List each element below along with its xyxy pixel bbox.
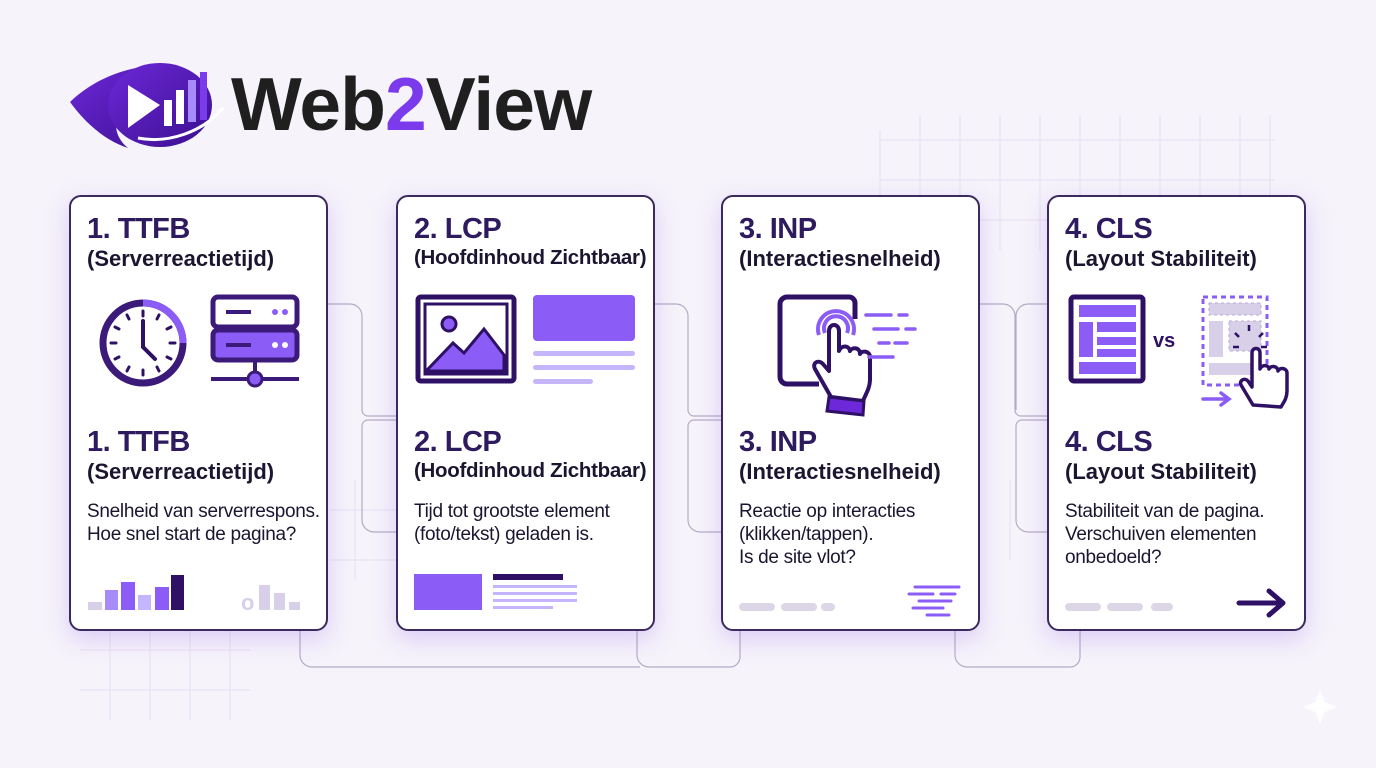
arrow decoration — [1065, 588, 1286, 618]
description — [739, 501, 915, 568]
icon: stable vs shifting layout — [1068, 294, 1289, 409]
description: Tijd tot grootste element — [414, 501, 610, 522]
description: (foto/tekst) geladen is. — [414, 524, 594, 545]
heading: 1. TTFB — [87, 213, 190, 245]
subheading: (Interactiesnelheid) — [739, 246, 941, 271]
subheading repeat: (Serverreactietijd) — [87, 459, 274, 484]
subheading repeat: (Layout Stabiliteit) — [1065, 459, 1257, 484]
heading repeat: 2. LCP — [414, 426, 501, 458]
icon: clock and server — [100, 294, 300, 388]
icon: image and content block — [416, 294, 635, 384]
subheading repeat: (Hoofdinhoud Zichtbaar) — [414, 459, 646, 482]
description: Is de site vlot? — [739, 547, 856, 568]
description: Hoe snel start de pagina? — [87, 524, 296, 545]
description: (klikken/tappen). — [739, 524, 873, 545]
icon: stable vs shifting layout: vs — [1153, 330, 1175, 352]
heading: 2. LCP — [414, 213, 501, 245]
heading repeat: 3. INP — [739, 426, 817, 458]
heading: 3. INP — [739, 213, 817, 245]
description: Stabiliteit van de pagina. — [1065, 501, 1264, 522]
icon: eye logo — [70, 63, 224, 148]
progress decoration — [739, 586, 960, 616]
bar chart decoration — [88, 575, 300, 615]
brand name: Web2View — [231, 62, 591, 146]
description: Snelheid van serverrespons. — [87, 501, 320, 522]
panel: INP — [721, 195, 980, 631]
description — [414, 501, 610, 545]
panel: TTFB — [69, 195, 328, 631]
logo — [70, 62, 592, 148]
heading repeat: 1. TTFB — [87, 426, 190, 458]
subheading: (Layout Stabiliteit) — [1065, 246, 1257, 271]
bar chart decoration: o — [241, 590, 254, 615]
subheading repeat: (Interactiesnelheid) — [739, 459, 941, 484]
description: Reactie op interacties — [739, 501, 915, 522]
icon: tap hand — [778, 294, 917, 417]
heading repeat: 4. CLS — [1065, 426, 1152, 458]
description — [1065, 501, 1264, 568]
subheading: (Serverreactietijd) — [87, 246, 274, 271]
content decoration — [414, 574, 577, 610]
description: onbedoeld? — [1065, 547, 1161, 568]
panel: CLS — [1047, 195, 1306, 631]
panel: LCP — [396, 195, 655, 631]
subheading: (Hoofdinhoud Zichtbaar) — [414, 246, 646, 269]
description — [87, 501, 320, 545]
description: Verschuiven elementen — [1065, 524, 1256, 545]
heading: 4. CLS — [1065, 213, 1152, 245]
